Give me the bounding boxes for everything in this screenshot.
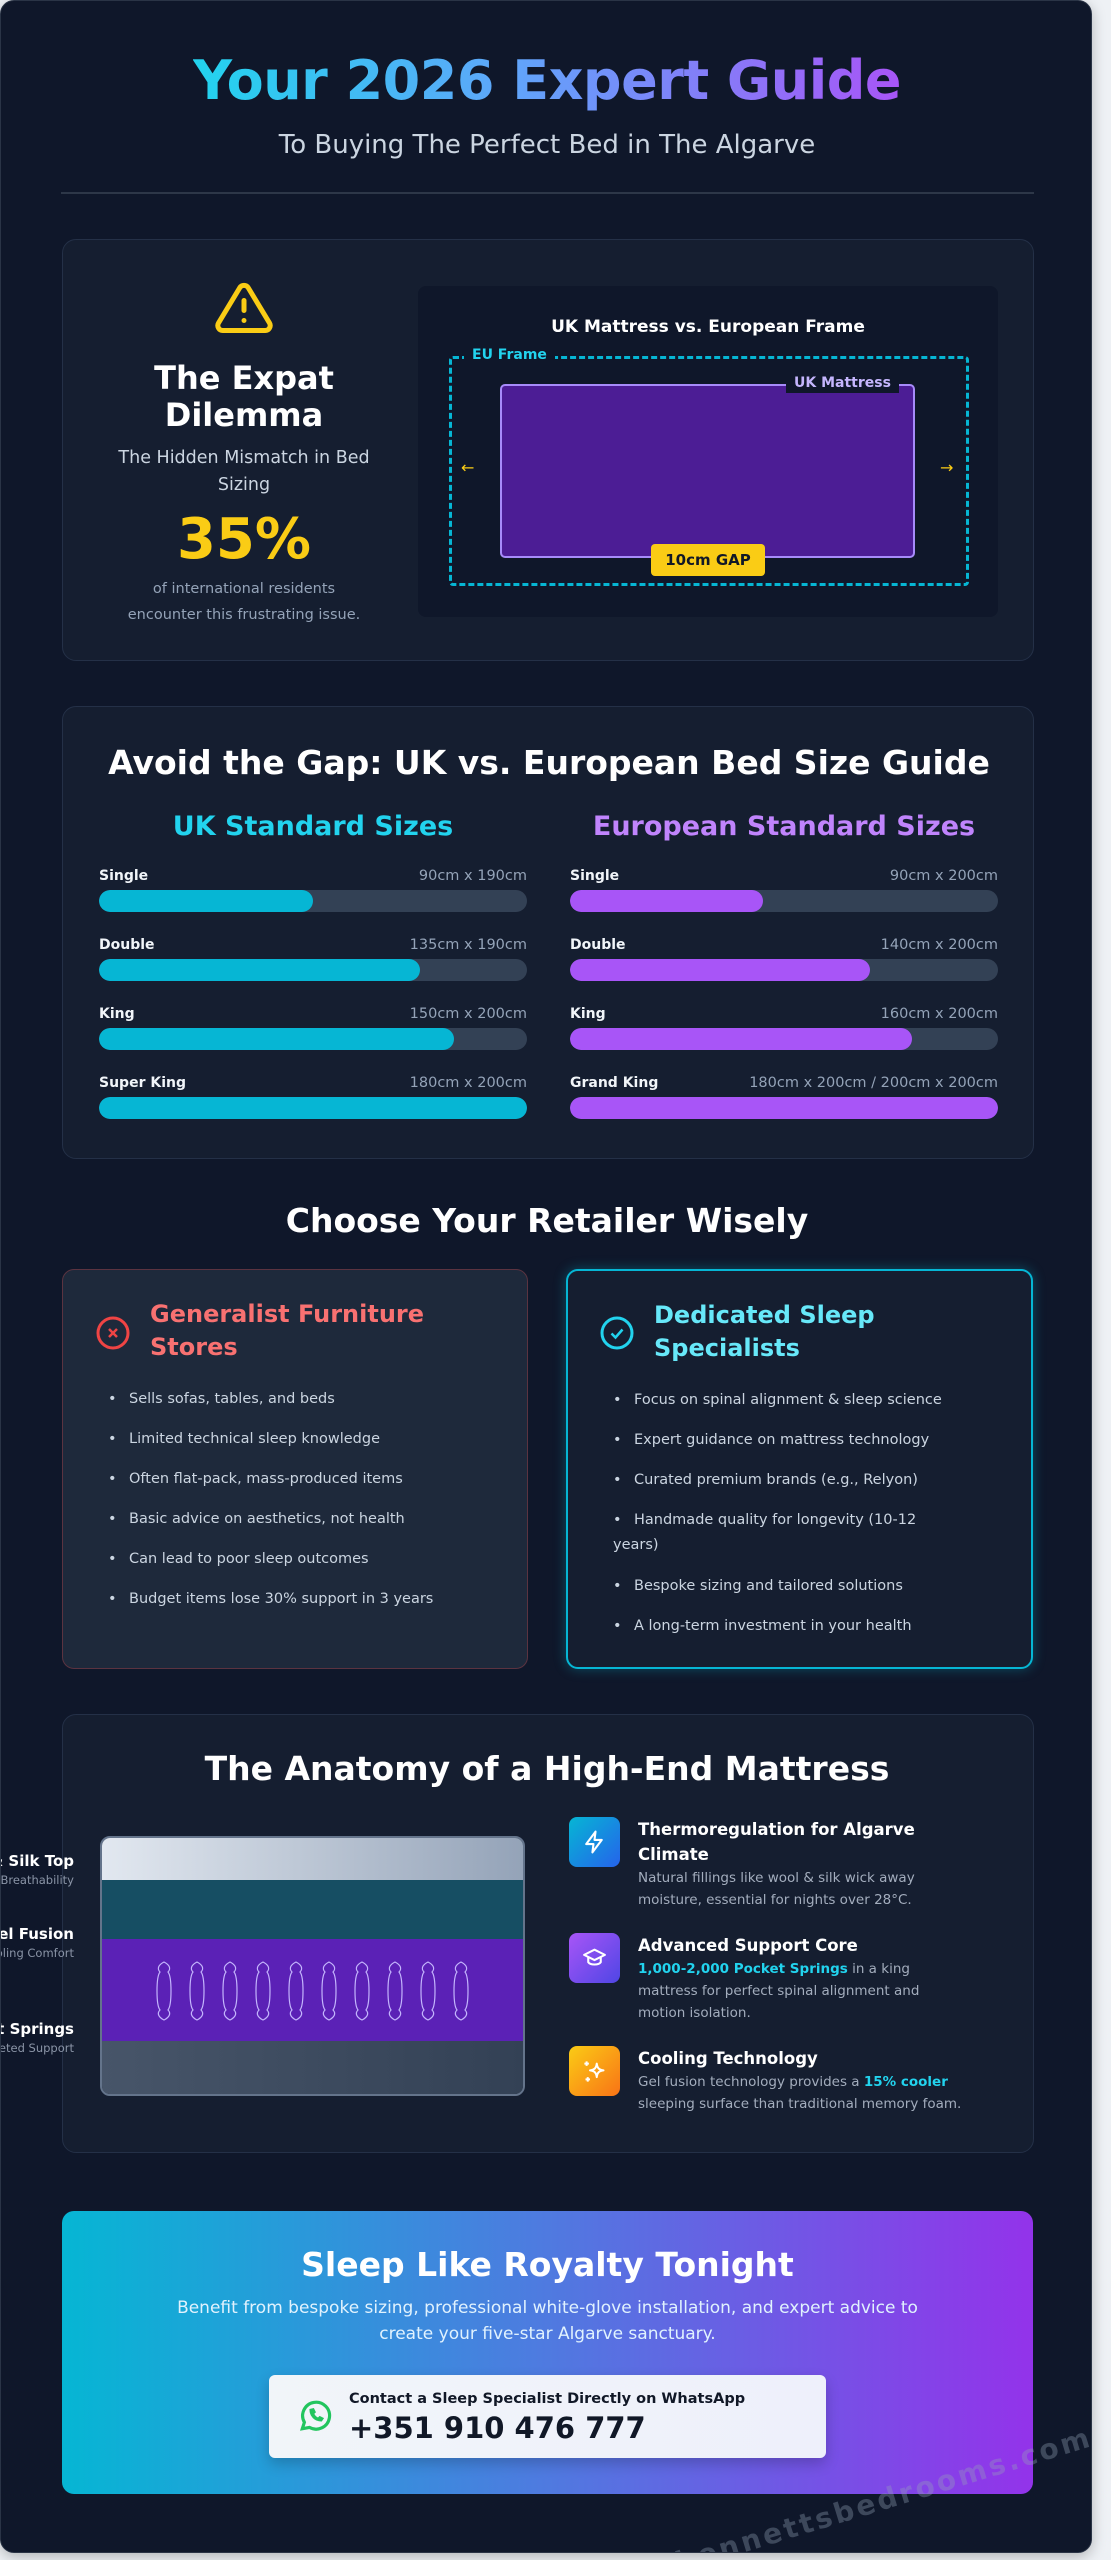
feature: cooling xyxy=(638,2049,961,2112)
eu bars: 140cm x 200cm xyxy=(881,937,998,953)
feature: thermoregulation: Natural fillings like wool & silk wick away moisture, essential for nights over 28°C. xyxy=(638,1870,915,1908)
bullet list: A long-term investment in your health xyxy=(634,1618,912,1634)
label: pocket springs xyxy=(0,2020,74,2055)
label: uk mattress: UK Mattress xyxy=(794,375,891,391)
phone number: +351 910 476 777 xyxy=(349,2411,646,2445)
eu bars xyxy=(570,868,998,1119)
icon: support core xyxy=(569,1933,620,1983)
column heading: eu: European Standard Sizes xyxy=(593,811,975,842)
bullet list: Expert guidance on mattress technology xyxy=(634,1432,929,1448)
eu bars: 90cm x 200cm xyxy=(890,868,998,884)
text: stat caption: of international residents encounter this frustrating issue. xyxy=(128,581,360,623)
label: 10cm gap: 10cm GAP xyxy=(665,551,751,569)
heading: the expat dilemma xyxy=(154,359,334,434)
subtitle: To Buying The Perfect Bed in The Algarve xyxy=(279,130,815,160)
eu bars: 180cm x 200cm / 200cm x 200cm xyxy=(749,1075,998,1091)
eu bars: Single xyxy=(570,868,619,884)
contact box xyxy=(269,2375,826,2458)
uk bars: King xyxy=(99,1006,135,1022)
eu bars: 160cm x 200cm xyxy=(881,1006,998,1022)
bullet list: Often flat-pack, mass-produced items xyxy=(129,1471,403,1487)
eu bars: Grand King xyxy=(570,1075,658,1091)
feature: support core: Advanced Support Core xyxy=(638,1936,858,1955)
uk bars: Single xyxy=(99,868,148,884)
feature: thermoregulation: Thermoregulation for Algarve Climate xyxy=(638,1820,915,1864)
uk bars: 180cm x 200cm xyxy=(410,1075,527,1091)
bullet list: Budget items lose 30% support in 3 years xyxy=(129,1591,433,1607)
panel: sleep specialists xyxy=(566,1269,1033,1669)
label: gel fusion xyxy=(0,1925,74,1960)
card title: Dedicated Sleep Specialists xyxy=(654,1301,875,1362)
eu bars: King xyxy=(570,1006,606,1022)
label: 10cm gap xyxy=(651,544,765,576)
eu bars: Double xyxy=(570,937,626,953)
stat: 35%: 35% xyxy=(177,507,311,572)
uk bars: Super King xyxy=(99,1075,186,1091)
icon: x circle xyxy=(96,1316,130,1350)
panel: mattress anatomy xyxy=(62,1714,1034,2153)
cta text: Benefit from bespoke sizing, professional white-glove installation, and expert advice to create your five-star Algarve sanctuary. xyxy=(177,2298,918,2344)
layer: springs xyxy=(102,1939,523,2041)
icon: sparkle xyxy=(569,2046,620,2096)
bullet list: years) xyxy=(613,1537,659,1553)
bullet list: Basic advice on aesthetics, not health xyxy=(129,1511,405,1527)
heading: anatomy: The Anatomy of a High-End Mattress xyxy=(205,1749,889,1788)
arrow right: → xyxy=(940,458,953,477)
arrow left: ← xyxy=(461,458,474,477)
uk bars: 135cm x 190cm xyxy=(410,937,527,953)
heading: choose retailer: Choose Your Retailer Wisely xyxy=(286,1201,808,1240)
icon: lightning xyxy=(569,1817,620,1867)
bullet list: Curated premium brands (e.g., Relyon) xyxy=(634,1472,918,1488)
feature: support core: 1,000-2,000 Pocket Springs in a king mattress for perfect spinal alignment and motion isolation. xyxy=(638,1961,919,2021)
uk bars xyxy=(99,868,527,1119)
bullet list: Focus on spinal alignment & sleep science xyxy=(634,1392,942,1408)
feature: cooling: Gel fusion technology provides a 15% cooler sleeping surface than traditional memory foam. xyxy=(638,2074,961,2112)
panel: expat dilemma xyxy=(62,239,1034,661)
label: silk top xyxy=(0,1852,74,1887)
bullet list xyxy=(110,1391,433,1607)
panel: generalist stores xyxy=(62,1269,528,1669)
text: hidden mismatch: The Hidden Mismatch in Bed Sizing xyxy=(118,448,370,495)
eu frame xyxy=(449,356,969,586)
column heading: uk: UK Standard Sizes xyxy=(173,811,453,842)
uk mattress xyxy=(500,384,915,558)
card title: Generalist Furniture Stores xyxy=(150,1300,424,1361)
label: uk mattress xyxy=(786,373,899,393)
chart: mattress vs frame xyxy=(418,286,998,617)
feature: cooling: Cooling Technology xyxy=(638,2049,818,2068)
label: eu frame xyxy=(464,344,555,366)
title: Your 2026 Expert Guide xyxy=(193,49,901,112)
diagram title: UK Mattress vs. European Frame xyxy=(551,317,865,337)
diagram: mattress layers xyxy=(100,1836,525,2096)
bullet list: Sells sofas, tables, and beds xyxy=(129,1391,335,1407)
heading: the expat dilemma: The Expat xyxy=(154,359,334,397)
bullet list: Handmade quality for longevity (10-12 xyxy=(634,1512,916,1528)
bullet list: Limited technical sleep knowledge xyxy=(129,1431,380,1447)
heading: the expat dilemma: Dilemma xyxy=(165,396,323,434)
heading: Avoid the Gap: UK vs. European Bed Size Guide xyxy=(108,743,990,782)
uk bars: Double xyxy=(99,937,155,953)
uk bars: 90cm x 190cm xyxy=(419,868,527,884)
bullet list xyxy=(613,1392,942,1634)
bullet list: Bespoke sizing and tailored solutions xyxy=(634,1578,903,1594)
icon: whatsapp xyxy=(300,2400,332,2431)
icon: warning xyxy=(215,282,273,333)
contact text: Contact a Sleep Specialist Directly on WhatsApp xyxy=(349,2391,745,2407)
cta heading: Sleep Like Royalty Tonight xyxy=(301,2245,794,2284)
bullet list: Can lead to poor sleep outcomes xyxy=(129,1551,369,1567)
icon: check circle xyxy=(600,1316,634,1350)
feature: thermoregulation xyxy=(638,1820,915,1908)
label: silk top: Breathability xyxy=(0,1873,74,1887)
label: eu frame: EU Frame xyxy=(472,347,547,363)
panel: bed size guide xyxy=(62,706,1034,1159)
uk bars: 150cm x 200cm xyxy=(410,1006,527,1022)
panel: call to action xyxy=(62,2211,1033,2494)
